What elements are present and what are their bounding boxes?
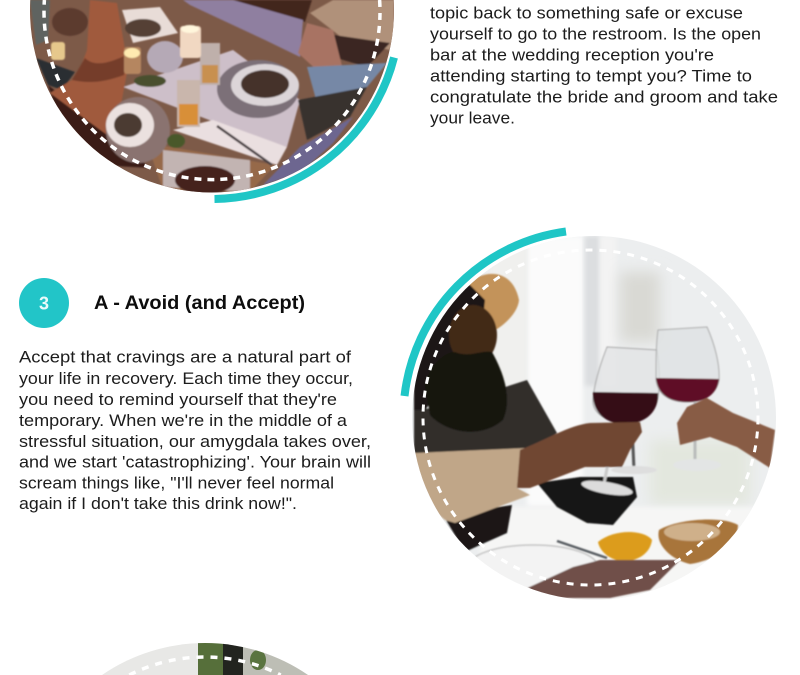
- glass bowl: [147, 41, 183, 73]
- paragraph: leave the situation: yourself to go to the restroom. Is the open: [430, 24, 761, 44]
- beard: [425, 352, 507, 432]
- paragraph: accept cravings: Accept that cravings are a natural part of: [19, 348, 351, 366]
- green garnish: [134, 75, 166, 87]
- blonde hair: [310, 0, 394, 50]
- paragraph: accept cravings: scream things like, "I'll never feel normal: [19, 474, 334, 492]
- paragraph: leave the situation: [430, 4, 778, 128]
- photo: toasting with red wine: [410, 236, 778, 602]
- left edge shadow: [30, 0, 50, 45]
- paragraph: leave the situation: topic back to something safe or excuse: [430, 4, 743, 22]
- far hand: [677, 398, 775, 468]
- white paper: [173, 120, 287, 165]
- man's suit: [414, 380, 557, 455]
- face: [298, 22, 342, 68]
- lower left dark: [48, 85, 150, 168]
- fork: [557, 541, 607, 558]
- bread bowl: [658, 520, 738, 564]
- teal arc on first photo: [214, 58, 394, 199]
- paragraph: accept cravings: [19, 348, 371, 513]
- right wine glass: [656, 327, 719, 402]
- candle centre: [180, 26, 201, 58]
- lemon half: [598, 532, 652, 561]
- dark vest: [298, 87, 367, 140]
- purple jacket: [263, 117, 353, 185]
- drinking glass upper: [200, 43, 220, 85]
- number badge 3: [19, 278, 69, 328]
- number badge 3: 3: [39, 294, 49, 314]
- flowers on table: [52, 8, 88, 36]
- man's hat: [468, 274, 519, 333]
- bright window background: [527, 236, 583, 506]
- photo: next section circle, cropped at bottom: [102, 643, 308, 675]
- paragraph: accept cravings: your life in recovery. Each time they occur,: [19, 369, 353, 388]
- dark hair: [414, 283, 485, 410]
- scarf: [306, 62, 386, 98]
- dinner plate right: [217, 60, 299, 118]
- blue sleeve: [183, 0, 303, 57]
- tablecloth: [123, 50, 300, 147]
- plate left: [106, 97, 170, 163]
- paragraph: accept cravings: and we start 'catastrophizing'. Your brain will: [19, 452, 371, 472]
- paragraph: accept cravings: you need to remind yourself that they're: [19, 390, 337, 409]
- near arm: [517, 422, 642, 488]
- orange sleeve: [50, 0, 128, 137]
- dashed inner ring: [44, 0, 380, 180]
- dark hair: [334, 34, 390, 65]
- dashed inner ring: [423, 250, 758, 585]
- white table: [482, 508, 752, 600]
- paragraph: accept cravings: temporary. When we're in the middle of a: [19, 411, 348, 430]
- white bowl top: [122, 7, 178, 43]
- paragraph: accept cravings: stressful situation, our amygdala takes over,: [19, 432, 371, 451]
- knife: [217, 126, 272, 165]
- paragraph: leave the situation: bar at the wedding reception you're: [430, 46, 714, 64]
- heading: A - Avoid (and Accept): A - Avoid (and Accept): [94, 292, 305, 314]
- teal arc on second photo: [404, 232, 566, 396]
- stems and bases: [632, 425, 634, 470]
- food on board: [523, 560, 680, 598]
- knit sleeve: [414, 448, 530, 523]
- paragraph: leave the situation: your leave.: [430, 108, 515, 128]
- paragraph: leave the situation: attending starting to tempt you? Time to: [430, 66, 752, 86]
- photo: friends dining at candlelit table: [30, 0, 394, 194]
- bottom bowl: [163, 150, 250, 192]
- drinking glass lower: [177, 80, 200, 127]
- left wine glass bowl: [593, 347, 659, 423]
- plate: [468, 545, 598, 589]
- man's face: [448, 304, 498, 356]
- dashed inner ring: [129, 657, 281, 675]
- wood bottom: [152, 146, 275, 192]
- paragraph: accept cravings: again if I don't take this drink now!".: [19, 494, 297, 513]
- paragraph: leave the situation: congratulate the bride and groom and take: [430, 88, 778, 106]
- dark background above blue sleeve: [230, 0, 312, 22]
- candle left: [124, 47, 141, 74]
